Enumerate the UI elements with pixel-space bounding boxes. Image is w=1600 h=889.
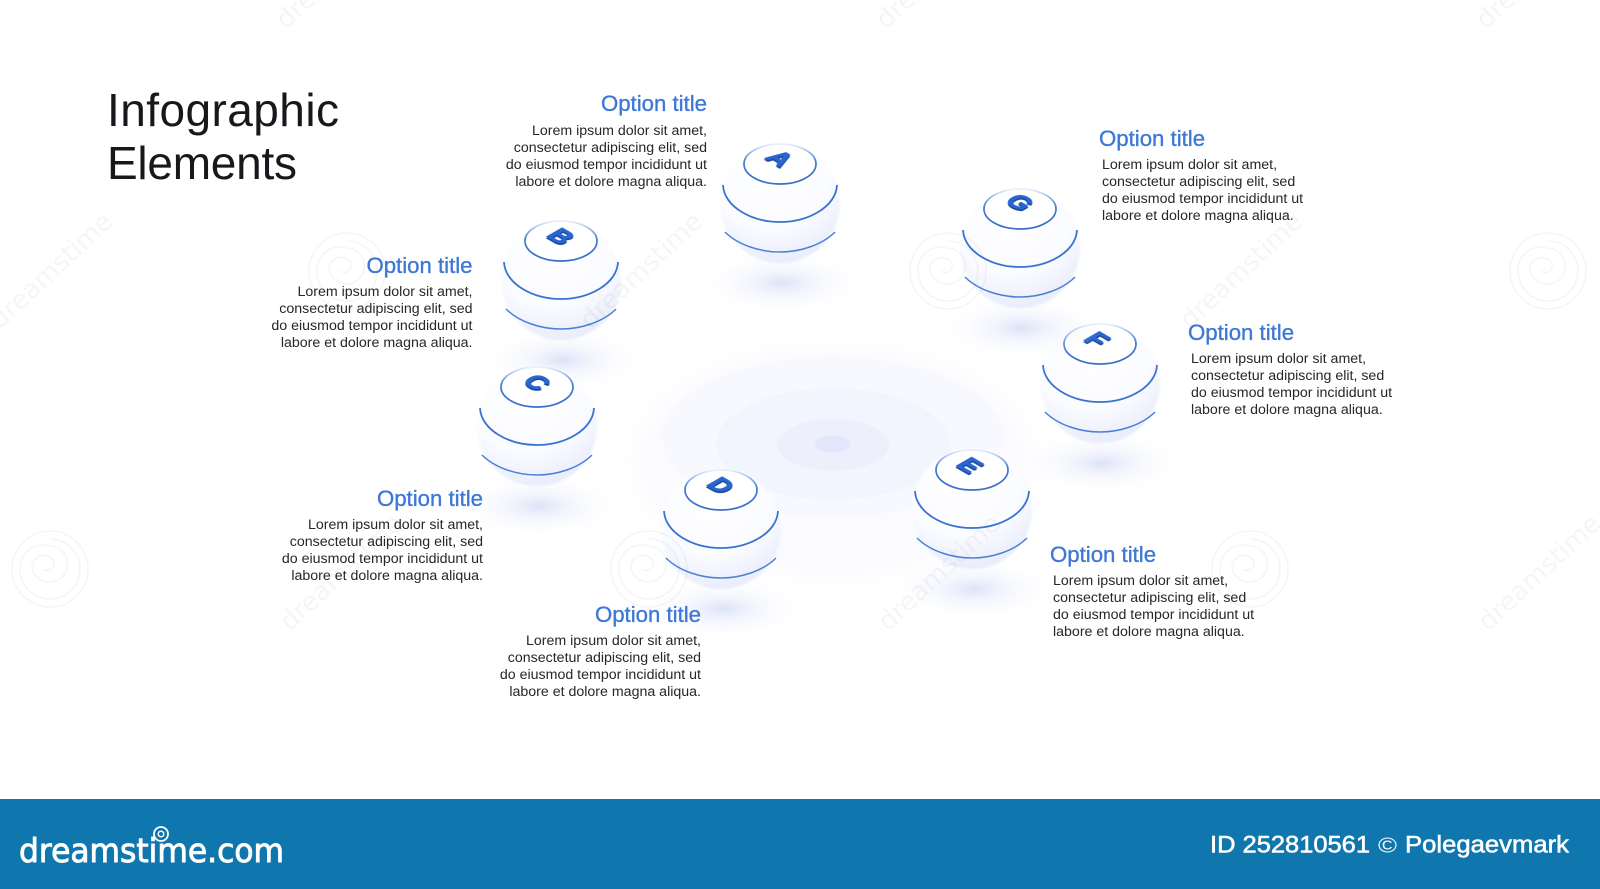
- text block B: do eiusmod tempor incididunt ut: [271, 318, 473, 334]
- text block C: do eiusmod tempor incididunt ut: [282, 551, 483, 567]
- footer credit: ID 252810561: [1210, 832, 1370, 858]
- text block E: consectetur adipiscing elit, sed: [1053, 590, 1246, 606]
- title: Infographic: [107, 84, 339, 136]
- text block E: Lorem ipsum dolor sit amet,: [1053, 573, 1228, 589]
- text block A: do eiusmod tempor incididunt ut: [506, 157, 707, 173]
- text block A: labore et dolore magna aliqua.: [515, 174, 707, 190]
- text block F: Option title: [1188, 320, 1294, 345]
- watermark: spirals and diagonal text: dreamstime: [1174, 207, 1309, 335]
- watermark: spirals and diagonal text: [0, 0, 1600, 637]
- text block B: [271, 253, 473, 351]
- sphere F: [1024, 323, 1180, 493]
- footer band: [0, 799, 1600, 889]
- title: [107, 84, 339, 189]
- text block D: [500, 602, 701, 700]
- text block G: do eiusmod tempor incididunt ut: [1102, 191, 1303, 207]
- text block C: Lorem ipsum dolor sit amet,: [308, 517, 483, 533]
- text block G: labore et dolore magna aliqua.: [1102, 208, 1294, 224]
- text block F: labore et dolore magna aliqua.: [1191, 402, 1383, 418]
- text block C: [282, 486, 483, 584]
- sphere C: [461, 366, 617, 536]
- text block D: labore et dolore magna aliqua.: [509, 684, 701, 700]
- text block F: consectetur adipiscing elit, sed: [1191, 368, 1384, 384]
- text block G: [1099, 126, 1303, 224]
- sphere F: F: [1077, 328, 1117, 350]
- text block A: consectetur adipiscing elit, sed: [514, 140, 707, 156]
- sphere G: [944, 188, 1100, 358]
- text block E: Option title: [1050, 542, 1156, 567]
- sphere E: [896, 449, 1052, 619]
- footer credit: [1210, 832, 1570, 858]
- sphere C: C: [516, 370, 558, 394]
- text block D: Lorem ipsum dolor sit amet,: [526, 633, 701, 649]
- text block C: Option title: [377, 486, 483, 511]
- sphere B: B: [540, 224, 582, 248]
- title: Elements: [107, 137, 297, 189]
- watermark: spirals and diagonal text: dreamstime: [872, 509, 1007, 637]
- text block F: do eiusmod tempor incididunt ut: [1191, 385, 1392, 401]
- footer credit: ©: [1378, 834, 1398, 858]
- footer credit: Polegaevmark: [1405, 832, 1570, 858]
- text block E: do eiusmod tempor incididunt ut: [1053, 607, 1254, 623]
- text block G: Option title: [1099, 126, 1205, 151]
- watermark: spirals and diagonal text: dreamstime: [274, 509, 409, 637]
- text block F: Lorem ipsum dolor sit amet,: [1191, 351, 1366, 367]
- text block D: consectetur adipiscing elit, sed: [508, 650, 701, 666]
- sphere D: [645, 469, 801, 639]
- footer logo: dreamstime.com: [19, 831, 284, 870]
- text block C: consectetur adipiscing elit, sed: [290, 534, 483, 550]
- text block D: do eiusmod tempor incididunt ut: [500, 667, 701, 683]
- watermark: spirals and diagonal text: dreamstime: [574, 207, 709, 335]
- text block B: Lorem ipsum dolor sit amet,: [297, 284, 472, 300]
- sphere E: E: [949, 453, 991, 477]
- sphere D: D: [700, 473, 742, 497]
- sphere A: [704, 143, 860, 313]
- text block F: [1188, 320, 1392, 418]
- text block G: consectetur adipiscing elit, sed: [1102, 174, 1295, 190]
- text block A: Option title: [601, 91, 707, 116]
- text block A: [506, 91, 707, 190]
- sphere G: G: [998, 189, 1042, 215]
- text block E: labore et dolore magna aliqua.: [1053, 624, 1245, 640]
- text block A: Lorem ipsum dolor sit amet,: [532, 123, 707, 139]
- concentric base rings: [593, 322, 1073, 602]
- sphere B: [485, 220, 641, 390]
- text block D: Option title: [595, 602, 701, 627]
- text block E: [1050, 542, 1254, 640]
- text block B: consectetur adipiscing elit, sed: [279, 301, 472, 317]
- text block B: labore et dolore magna aliqua.: [281, 335, 472, 351]
- text block B: Option title: [366, 253, 472, 278]
- text block G: Lorem ipsum dolor sit amet,: [1102, 157, 1277, 173]
- sphere A: A: [759, 146, 801, 170]
- text block C: labore et dolore magna aliqua.: [291, 568, 483, 584]
